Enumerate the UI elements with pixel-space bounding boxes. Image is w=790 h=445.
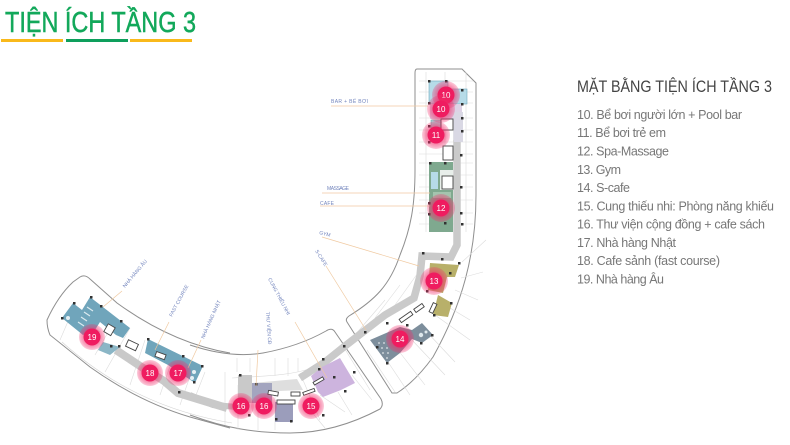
corridor (116, 110, 457, 408)
legend list: 10. Bể bơi người lớn + Pool bar (577, 108, 742, 122)
labels: GYM (319, 230, 331, 239)
marker 14 (386, 325, 414, 353)
marker 16 (228, 393, 254, 419)
block: s-cafe 14 (370, 323, 433, 363)
column dots (61, 80, 464, 422)
marker 11 (422, 121, 450, 149)
block: restaurant 17-18 (145, 339, 203, 383)
labels: FAST COURSE (168, 283, 191, 318)
legend list: 13. Gym (577, 163, 621, 177)
marker 10: 10 (437, 105, 446, 114)
labels (121, 98, 368, 345)
marker 18: 18 (146, 369, 155, 378)
legend list: 15. Cung thiếu nhi: Phòng năng khiếu (577, 200, 774, 214)
legend list: 12. Spa-Massage (577, 144, 669, 158)
labels: THƯ VIỆN CĐ (264, 312, 274, 345)
marker 16 (251, 393, 277, 419)
legend list: 11. Bể bơi trẻ em (577, 126, 666, 140)
marker 16: 16 (260, 402, 269, 411)
block: spa 12 (429, 162, 453, 232)
marker 13: 13 (430, 277, 439, 286)
marker 10 (427, 95, 455, 123)
block: pool 11 (431, 120, 445, 128)
marker 12: 12 (437, 204, 446, 213)
building outlines (47, 69, 476, 433)
markers (79, 81, 460, 419)
legend list (577, 108, 774, 286)
marker 19 (79, 324, 105, 350)
labels: NHÀ HÀNG ÂU (121, 258, 149, 289)
title: TIỆN ÍCH TẦNG 3 (5, 5, 196, 39)
labels: BAR + BỂ BƠI (331, 98, 368, 105)
labels: NHÀ HÀNG NHẬT (199, 299, 223, 340)
block: library 16 (252, 383, 293, 422)
leader lines (103, 106, 430, 386)
floor plan (47, 69, 486, 433)
marker 10 (432, 81, 460, 109)
blocks (61, 80, 467, 422)
grid lines (60, 72, 486, 430)
marker 11: 11 (432, 131, 441, 140)
labels: MASSAGE (327, 186, 350, 192)
marker 17 (165, 360, 191, 386)
marker 15: 15 (307, 402, 316, 411)
marker 14: 14 (396, 335, 405, 344)
labels: S-CAFE (313, 249, 328, 268)
legend list: 18. Cafe sảnh (fast course) (577, 254, 720, 268)
legend list: 19. Nhà hàng Âu (577, 272, 664, 286)
marker 19: 19 (88, 333, 97, 342)
block: cung thieu nhi 15 (311, 358, 355, 397)
labels: CAFE (320, 201, 335, 207)
block: gym 13 (428, 263, 459, 317)
marker 10: 10 (442, 91, 451, 100)
marker 15 (298, 393, 324, 419)
labels: CUNG THIẾU NHI (266, 277, 292, 316)
marker 12 (427, 194, 455, 222)
small core rooms (104, 119, 453, 404)
legend list: 14. S-cafe (577, 181, 630, 195)
marker 18 (137, 360, 163, 386)
marker 13 (420, 267, 448, 295)
block: restaurant 19 (62, 297, 130, 355)
marker 17: 17 (174, 369, 183, 378)
legend list: 16. Thư viện cộng đồng + cafe sách (577, 218, 765, 232)
block: pools 10 (429, 81, 467, 142)
legend list: 17. Nhà hàng Nhật (577, 236, 677, 250)
marker 16: 16 (237, 402, 246, 411)
